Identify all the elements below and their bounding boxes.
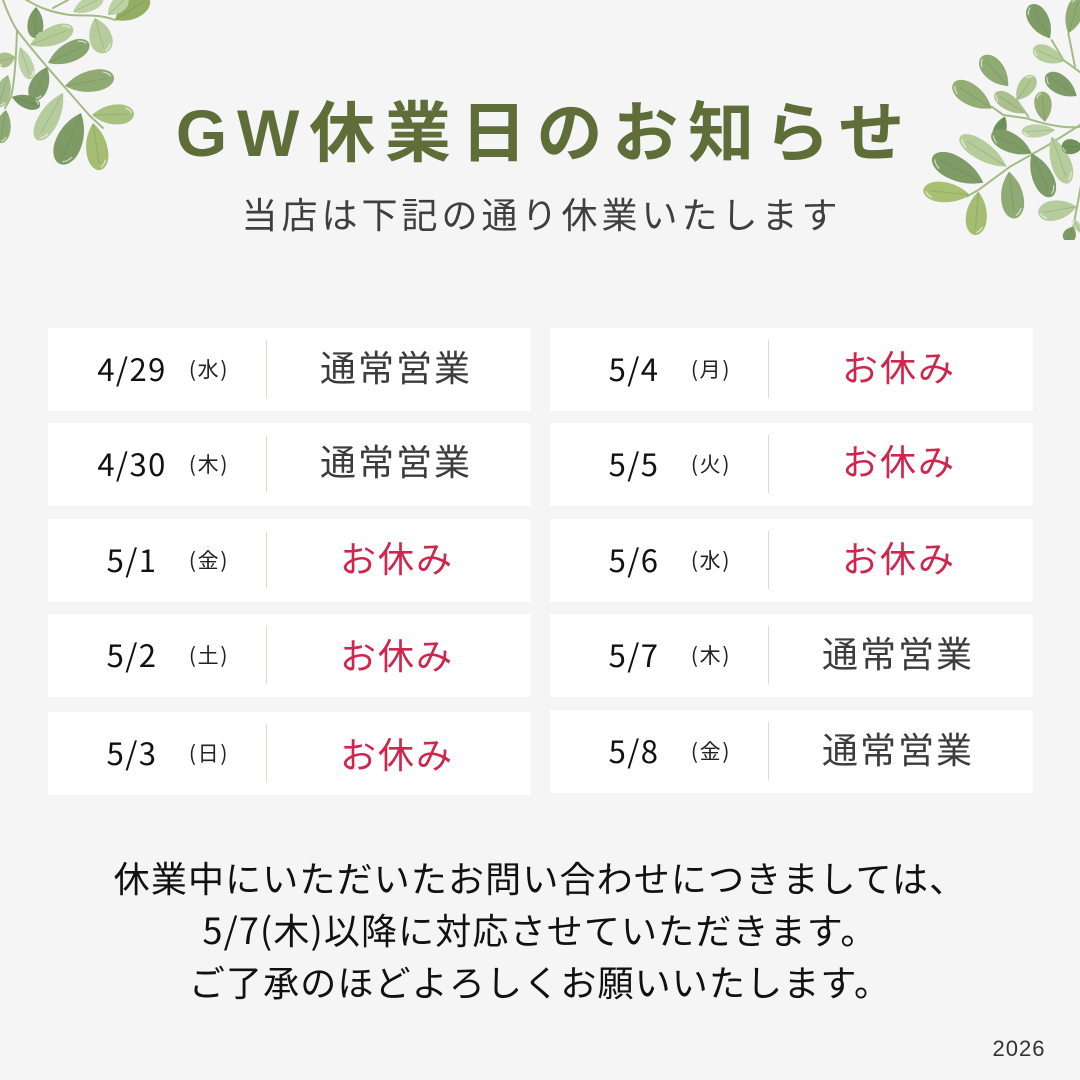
row 5/4: 5/4 bbox=[609, 345, 659, 390]
row 5/3: (日) bbox=[189, 738, 229, 768]
title: GW休業日のお知らせ bbox=[176, 96, 914, 170]
row 4/30: (木) bbox=[189, 449, 229, 479]
row 4/30 bbox=[48, 423, 531, 506]
row 5/8: (金) bbox=[691, 736, 731, 766]
row 5/3 bbox=[48, 712, 531, 795]
row 5/6: (水) bbox=[691, 545, 731, 575]
row 5/7: (木) bbox=[691, 640, 731, 670]
notice text bbox=[114, 851, 966, 1007]
notice text: 5/7(木)以降に対応させていただきます。 bbox=[203, 903, 877, 955]
panel: schedule left column bbox=[48, 328, 531, 795]
row 5/2: (土) bbox=[189, 640, 229, 670]
row 5/5: お休み bbox=[842, 434, 956, 486]
row 5/1: 5/1 bbox=[107, 536, 157, 581]
row 5/2: 5/2 bbox=[107, 631, 157, 676]
notice text: 休業中にいただいたお問い合わせにつきましては、 bbox=[114, 851, 966, 903]
icon: watercolor leaves top left bbox=[0, 0, 150, 170]
row 5/6 bbox=[550, 519, 1033, 602]
year label: 2026 bbox=[993, 1036, 1045, 1061]
row 5/1: お休み bbox=[340, 531, 454, 583]
row 5/7: 5/7 bbox=[609, 631, 659, 676]
icon: watercolor leaves top right bbox=[923, 0, 1080, 240]
row 4/30: 4/30 bbox=[97, 440, 167, 485]
row 4/29: 4/29 bbox=[97, 345, 167, 390]
row 5/3: お休み bbox=[340, 727, 454, 779]
row 5/8: 5/8 bbox=[609, 727, 659, 772]
row 5/6: お休み bbox=[842, 531, 956, 583]
row 5/8 bbox=[550, 710, 1033, 793]
row 5/5: (火) bbox=[691, 449, 731, 479]
row 5/1: (金) bbox=[189, 545, 229, 575]
row 5/7: 通常営業 bbox=[822, 626, 974, 678]
notice text: ご了承のほどよろしくお願いいたします。 bbox=[189, 955, 891, 1007]
row 4/29: (水) bbox=[189, 354, 229, 384]
row 5/5 bbox=[550, 423, 1033, 506]
row 5/7 bbox=[550, 614, 1033, 697]
row 4/29: 通常営業 bbox=[320, 340, 472, 392]
row 5/4 bbox=[550, 328, 1033, 411]
row 4/29 bbox=[48, 328, 531, 411]
panel: schedule right column bbox=[550, 328, 1033, 793]
row 4/30: 通常営業 bbox=[320, 434, 472, 486]
row 5/4: (月) bbox=[691, 354, 731, 384]
row 5/3: 5/3 bbox=[107, 729, 157, 774]
row 5/6: 5/6 bbox=[609, 536, 659, 581]
row 5/2 bbox=[48, 614, 531, 697]
row 5/5: 5/5 bbox=[609, 440, 659, 485]
row 5/2: お休み bbox=[340, 628, 454, 680]
row 5/8: 通常営業 bbox=[822, 722, 974, 774]
row 5/1 bbox=[48, 519, 531, 602]
subtitle: 当店は下記の通り休業いたします bbox=[241, 187, 842, 239]
row 5/4: お休み bbox=[842, 340, 956, 392]
